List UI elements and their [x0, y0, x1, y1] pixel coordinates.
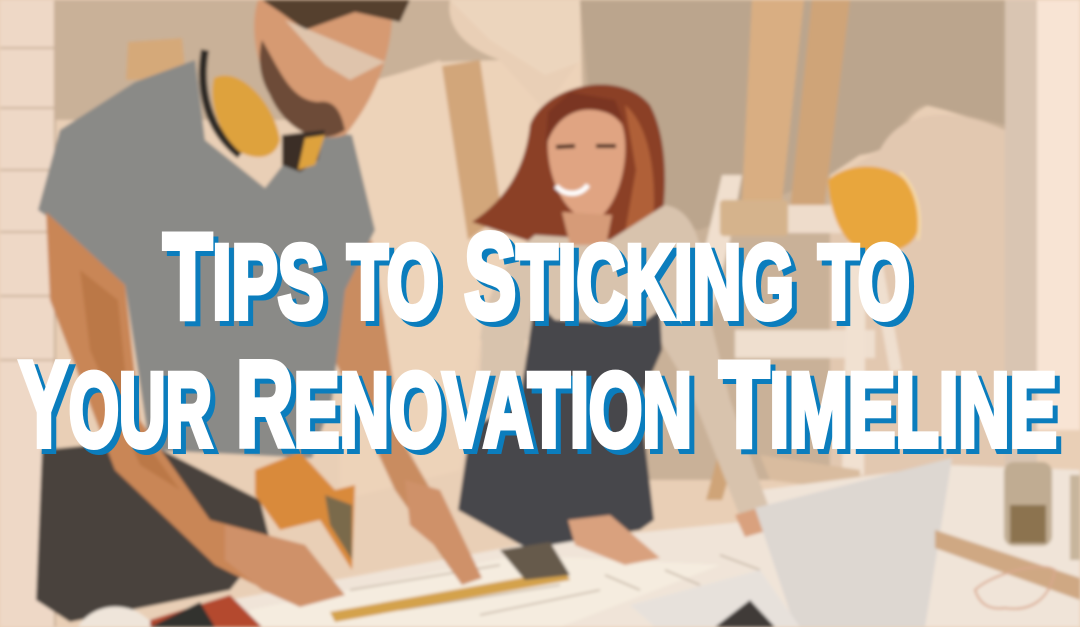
sweater torso and arms [480, 205, 768, 522]
title line 2: RENOVATION [236, 336, 692, 472]
wooden planks [126, 0, 850, 500]
grey plaster wall [56, 0, 1005, 480]
ear muffs [203, 50, 325, 172]
icon: yellow hard hat [828, 166, 920, 252]
title line 1: TO [347, 224, 439, 341]
title line 1: STICKING [464, 208, 794, 344]
woman [458, 85, 770, 565]
head [254, 0, 392, 138]
tool belt [255, 452, 355, 570]
laptop [630, 458, 952, 627]
man [36, 0, 482, 622]
table [120, 465, 1080, 627]
title line 2 [19, 336, 1057, 472]
title line 1: TO [818, 224, 910, 341]
title line 2: YOUR [19, 336, 212, 472]
neck [562, 212, 612, 245]
right arm [325, 240, 480, 585]
t-shirt [38, 60, 375, 458]
pants [36, 440, 270, 622]
hands [225, 525, 345, 607]
gold ruler [330, 570, 570, 622]
apron [458, 300, 662, 550]
title: Tips to Sticking to Your Renovation Timeline [19, 208, 1057, 472]
hands [568, 515, 660, 565]
wooden board and glasses [935, 530, 1080, 600]
face [548, 109, 625, 220]
hair back [472, 85, 665, 268]
bottom left tools [78, 607, 155, 627]
title line 1: TIPS [163, 208, 324, 344]
peeled plaster patch [340, 60, 582, 500]
left tiled wall [0, 0, 56, 627]
glass jar [1004, 462, 1052, 546]
title line 1 [163, 208, 910, 344]
left arm [46, 212, 340, 607]
window frame [1005, 0, 1037, 480]
white chair [680, 175, 902, 492]
safety glasses [285, 20, 385, 80]
